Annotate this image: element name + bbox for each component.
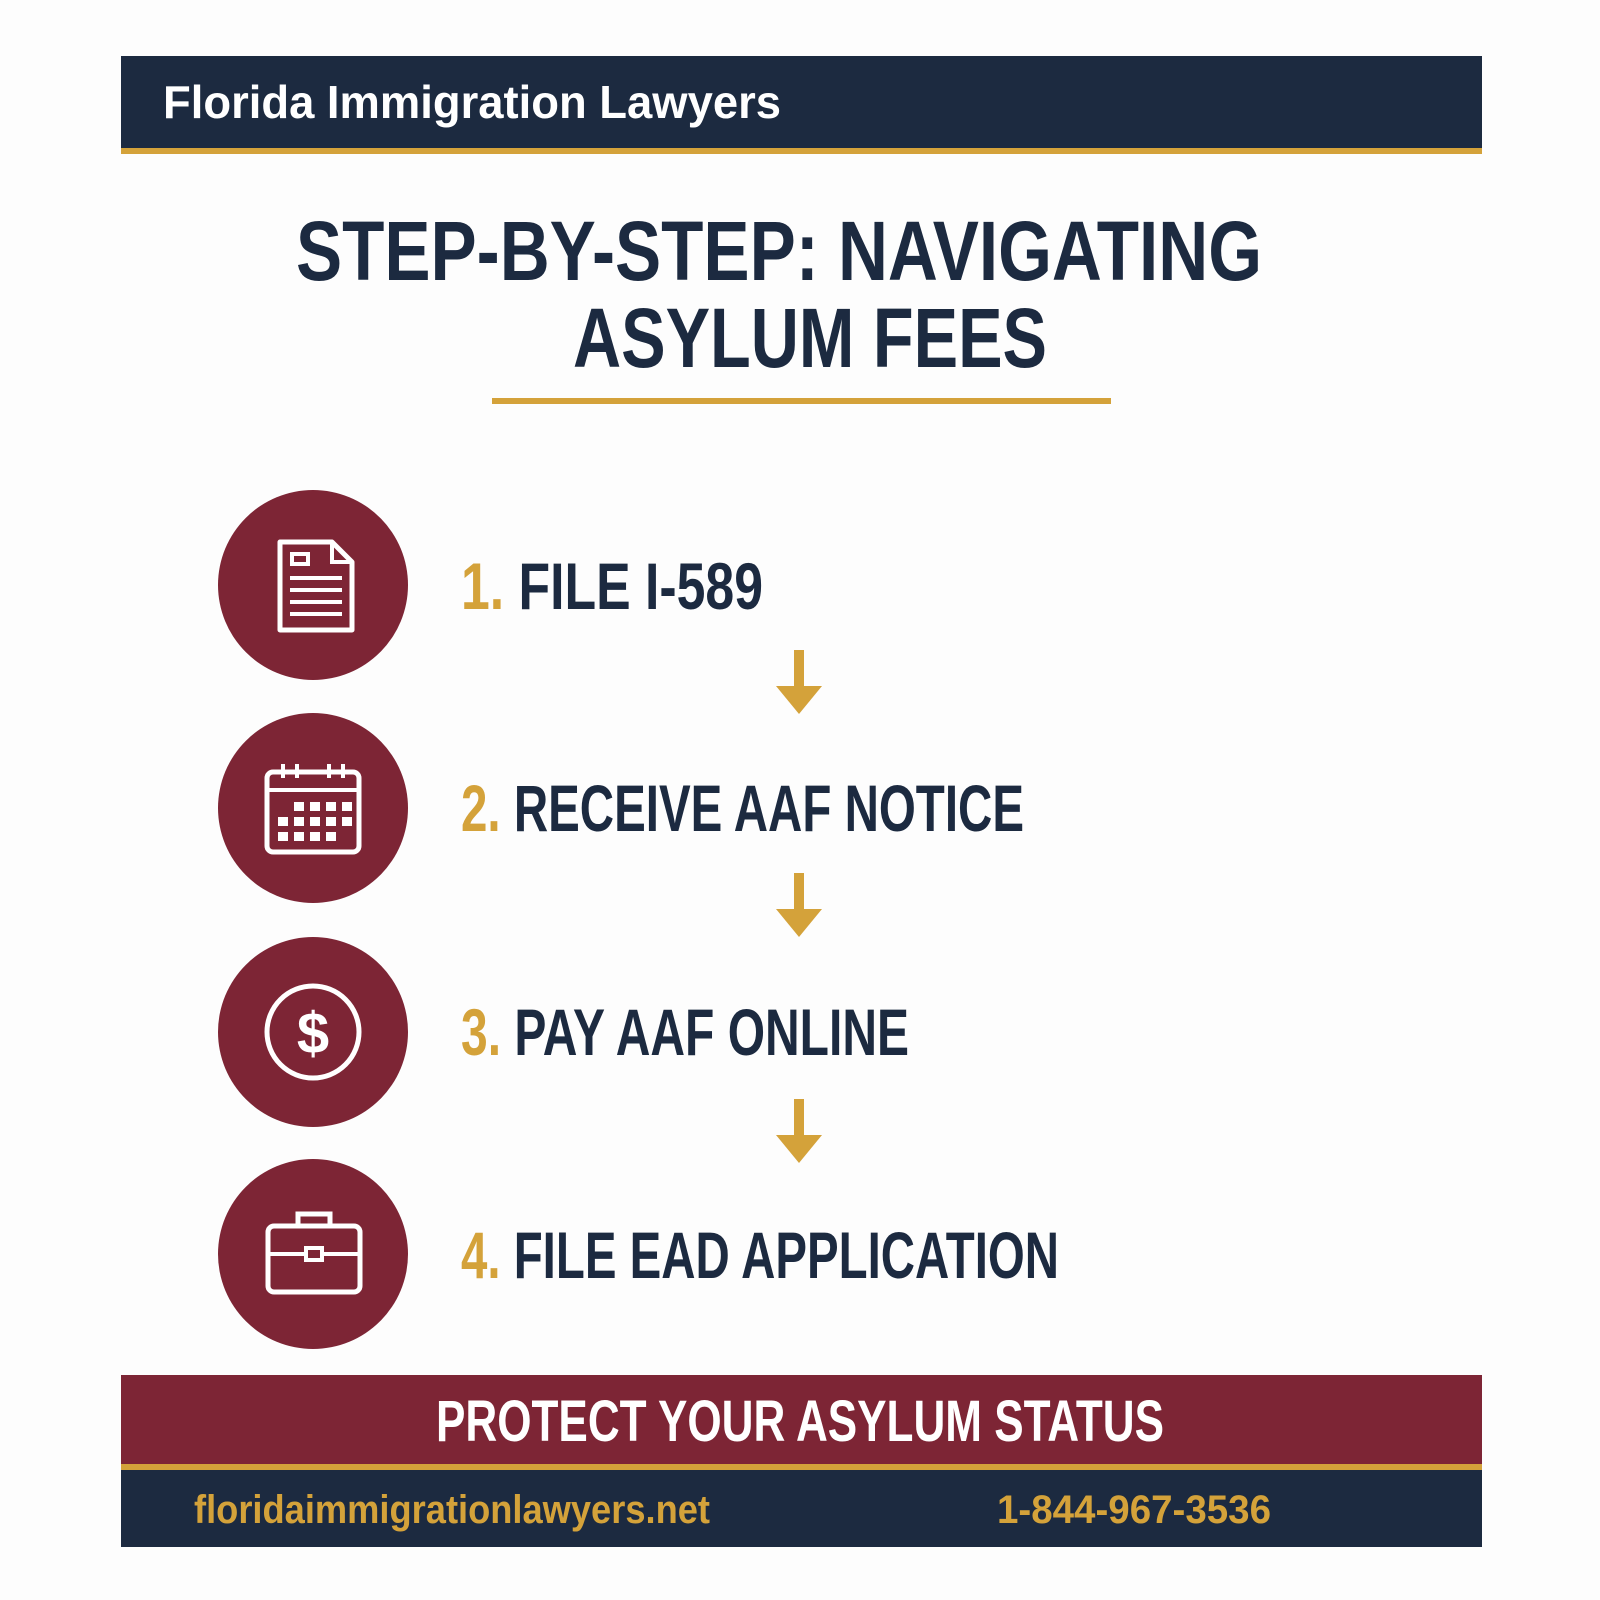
footer url: floridaimmigrationlawyers.net [194,1488,710,1532]
header text: Florida Immigration Lawyers [163,76,781,128]
title: STEP-BY-STEP: NAVIGATING [296,204,1262,298]
arrow 3 [776,1099,822,1163]
title underline [492,398,1111,404]
step 1 label: 1. FILE I-589 [461,549,763,623]
step 2 label: 2. RECEIVE AAF NOTICE [461,771,1024,845]
banner: protect: PROTECT YOUR ASYLUM STATUS [436,1389,1164,1454]
icon: calendar [218,713,408,903]
step 4 label: 4. FILE EAD APPLICATION [461,1218,1059,1292]
footer phone: 1-844-967-3536 [997,1488,1271,1532]
arrow 1 [776,650,822,714]
banner: protect [121,1375,1482,1465]
footer [121,1464,1482,1547]
step 1 [218,490,763,680]
icon: briefcase [218,1159,408,1349]
step 3 [218,937,909,1127]
icon: dollar: $ [297,1001,329,1066]
header bar [121,56,1482,154]
title: ASYLUM FEES [573,291,1047,385]
arrow 2 [776,873,822,937]
title [296,204,1262,385]
step 2 [218,713,1024,903]
step 4 [218,1159,1059,1349]
step 3 label: 3. PAY AAF ONLINE [461,995,909,1069]
icon: document [218,490,408,680]
icon: dollar [218,937,408,1127]
